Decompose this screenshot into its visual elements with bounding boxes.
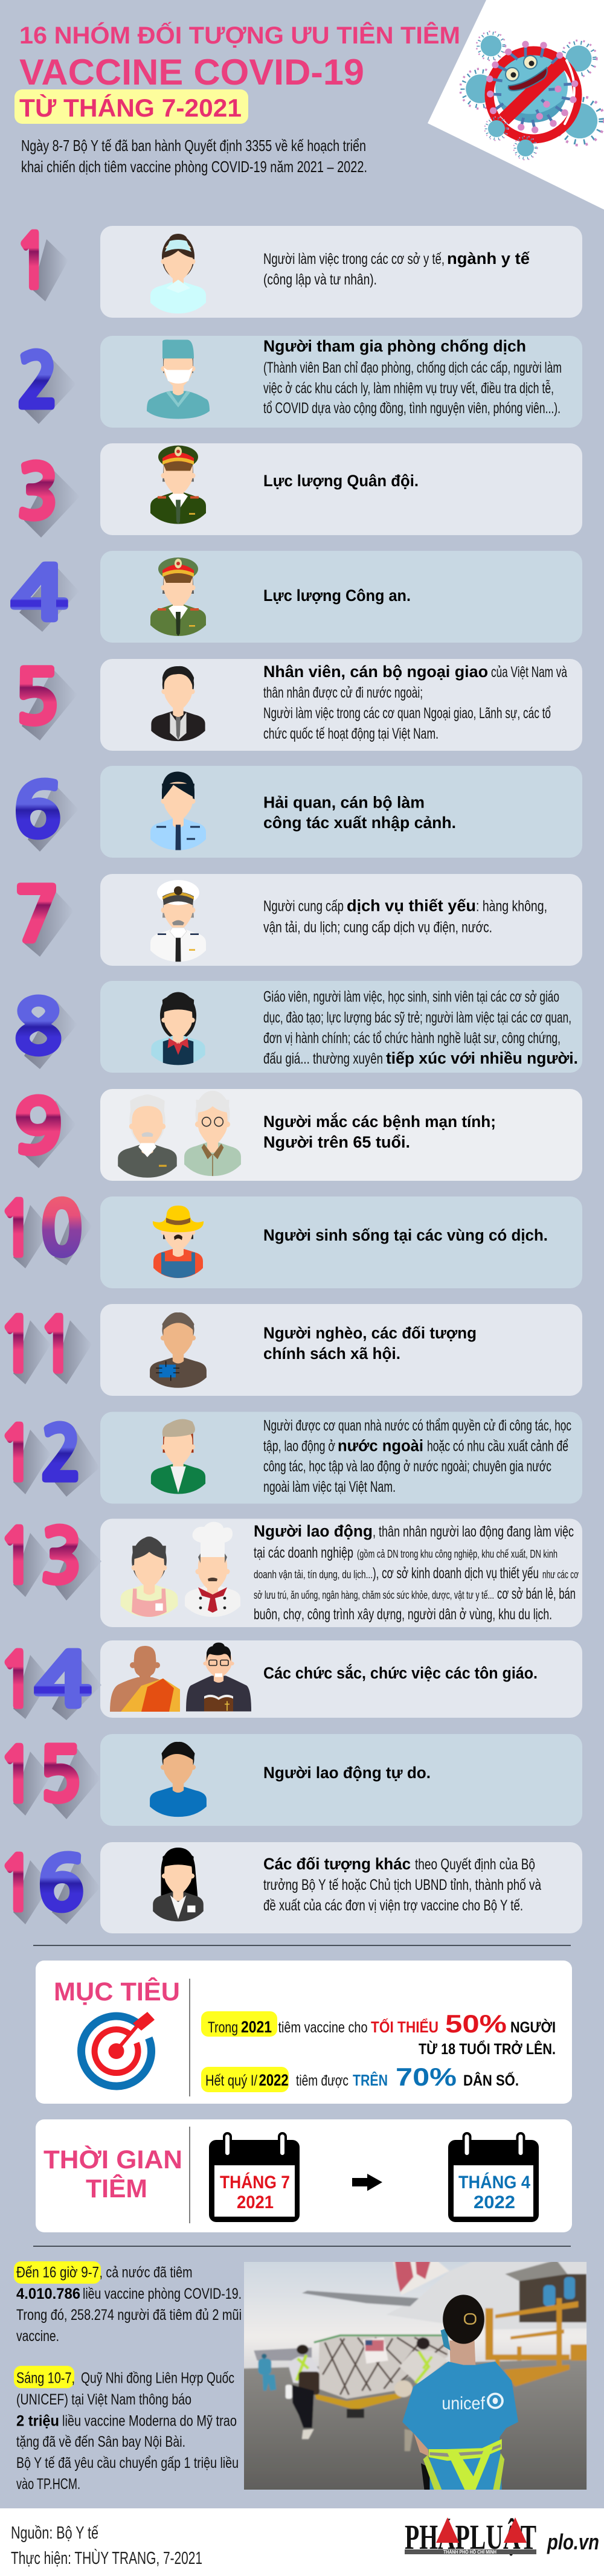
- text: chính sách xã hội.: [263, 1344, 400, 1363]
- icon: female worker: [121, 1537, 178, 1617]
- text: Người cung cấp: [263, 898, 344, 914]
- target 2022: DÂN SỐ.: [463, 2071, 519, 2089]
- text: Người tham gia phòng chống dịch: [263, 337, 526, 355]
- text block: Moderna delivery: 2 triệu: [16, 2412, 59, 2429]
- panel: goal: [36, 1961, 572, 2104]
- text: chức quốc tế hoạt động tại Việt Nam.: [263, 725, 439, 742]
- icon: elderly man: [118, 1094, 177, 1178]
- number 4: 4: [11, 558, 68, 631]
- number 14: 1: [0, 1645, 35, 1718]
- text: [263, 896, 547, 936]
- red ring and slash: [489, 51, 577, 139]
- text: ngoài làm việc tại Việt Nam.: [263, 1479, 396, 1495]
- text: ngành y tế: [447, 249, 530, 268]
- number 1: 1: [15, 226, 50, 299]
- text block: vaccination numbers: Trong đó, 258.274 người đã tiêm đủ 2 mũi: [16, 2307, 242, 2324]
- text: vận tải, du lịch; cung cấp dịch vụ điện, nước.: [263, 919, 492, 936]
- number 3: 3: [17, 457, 59, 530]
- panel: group 13: [0, 1518, 582, 1627]
- text: Các chức sắc, chức việc các tôn giáo.: [263, 1663, 538, 1682]
- icon: elderly woman: [184, 1091, 241, 1176]
- text: [263, 663, 567, 742]
- icon: soldier: [150, 446, 206, 524]
- text: : hàng không,: [476, 898, 547, 914]
- text block: vaccination numbers: Đến 16 giờ 9-7: [16, 2264, 99, 2281]
- target 2022: Hết quý I/: [205, 2072, 257, 2089]
- text: đấu giá... thường xuyên: [263, 1050, 383, 1067]
- number 9: 9: [14, 1091, 63, 1164]
- target 2021: Trong: [208, 2019, 238, 2036]
- text block: Moderna delivery: [14, 2366, 239, 2493]
- calendar: start: THÁNG 7: [220, 2172, 290, 2192]
- calendar: start: 2021: [237, 2192, 274, 2212]
- text block: vaccination numbers: liều vaccine phòng COVID-19.: [83, 2285, 242, 2302]
- target 2021: TỪ 18 TUỔI TRỞ LÊN.: [419, 2040, 556, 2058]
- text: dịch vụ thiết yếu: [347, 896, 476, 914]
- text: nước ngoài: [338, 1436, 423, 1454]
- icon: pilot: [150, 880, 206, 962]
- target 2021: tiêm vaccine cho: [278, 2019, 367, 2036]
- number 6: [13, 775, 79, 852]
- target 2021: 2021: [241, 2018, 272, 2036]
- number 11: [0, 1309, 92, 1384]
- text: đề xuất của các đơn vị viện trợ vaccine cho Bộ Y tế.: [263, 1897, 523, 1914]
- number 14: 4: [34, 1645, 91, 1718]
- icon: freelance worker: [150, 1742, 207, 1817]
- icon: overseas worker: [151, 1419, 205, 1494]
- text: [263, 337, 562, 417]
- target 2022: 70%: [396, 2063, 457, 2091]
- number 15: [0, 1739, 100, 1819]
- text block: vaccination numbers: [14, 2261, 242, 2345]
- panel: group 7: [14, 874, 582, 966]
- number 12: 1: [0, 1418, 35, 1491]
- target 2022: [201, 2063, 519, 2092]
- icon: chef: [185, 1522, 240, 1617]
- text: [263, 1112, 496, 1151]
- photo: vaccine shipment at airport: [240, 2258, 594, 2493]
- number 13: 1: [0, 1521, 35, 1594]
- number 15: 1: [0, 1739, 35, 1813]
- panel: group 15: [0, 1734, 582, 1826]
- panel: group 10: [0, 1193, 582, 1288]
- text: Người làm việc trong các cơ sở y tế,: [263, 251, 445, 268]
- text block: vaccination numbers: , cả nước đã tiêm: [99, 2264, 192, 2281]
- icon: target: [82, 2012, 155, 2086]
- source and author: Nguồn: Bộ Y tế: [11, 2523, 98, 2543]
- text: Người lao động: [254, 1522, 373, 1540]
- text: theo Quyết định của Bộ: [415, 1856, 535, 1873]
- panel: group 12: [0, 1412, 582, 1504]
- icon: police officer: [150, 557, 206, 636]
- panel: group 3: [17, 443, 582, 538]
- number 8: 8: [14, 992, 62, 1065]
- title: VACCINE COVID-19: [19, 52, 364, 92]
- panel: group 8: [14, 981, 582, 1073]
- text: tập, lao động ở: [263, 1437, 335, 1454]
- icon: poor worker: [150, 1312, 207, 1388]
- number 7: 7: [14, 879, 59, 952]
- number 2: 2: [17, 345, 59, 419]
- date badge: TỪ THÁNG 7-2021: [19, 93, 242, 122]
- calendar: end: 2022: [474, 2192, 515, 2212]
- number 16: 6: [37, 1848, 85, 1921]
- panel: group 5: [14, 659, 582, 751]
- target 2022: 2022: [259, 2071, 289, 2089]
- icon: monk: [110, 1646, 180, 1712]
- calendar: start: [209, 2132, 300, 2222]
- text: [263, 794, 456, 832]
- intro paragraph: [21, 137, 367, 176]
- calendar: end: THÁNG 4: [458, 2172, 530, 2192]
- text: Người lao động tự do.: [263, 1764, 431, 1782]
- panel: group 1: [15, 226, 582, 318]
- number 11: 1: [0, 1309, 35, 1383]
- text: tại các doanh nghiệp: [254, 1544, 353, 1561]
- text: (công lập và tư nhân).: [263, 271, 377, 288]
- text block: Moderna delivery: Bộ Y tế đã yêu cầu chuyển gấp 1 triệu liều: [16, 2455, 239, 2472]
- icon: medical worker with mask: [147, 339, 210, 419]
- source and author: [11, 2523, 202, 2568]
- number 10: [0, 1193, 92, 1268]
- panel: group 6: [13, 766, 582, 858]
- number 13: [0, 1521, 101, 1601]
- panel: group 2: [17, 336, 582, 428]
- face: [506, 56, 547, 91]
- panel: group 14: [0, 1640, 582, 1720]
- text block: vaccination numbers: vaccine.: [16, 2328, 59, 2345]
- panel: group 9: [14, 1089, 582, 1181]
- text: như các cơ: [542, 1569, 579, 1581]
- number 14: [0, 1645, 101, 1720]
- spikes: [486, 41, 578, 133]
- text block: Moderna delivery: vào TP.HCM.: [16, 2476, 80, 2493]
- text: Người trên 65 tuổi.: [263, 1133, 410, 1151]
- icon: farmer: [153, 1206, 204, 1278]
- text: Lực lượng Công an.: [263, 586, 411, 605]
- footer band: [0, 2508, 604, 2576]
- icon: office woman: [153, 1848, 204, 1921]
- text: Lực lượng Quân đội.: [263, 472, 419, 490]
- number 10: 1: [0, 1193, 35, 1267]
- text: sở lưu trú, ăn uống, ngân hàng, chăm sóc sức khỏe, dược, vật tư y tế...: [254, 1589, 494, 1601]
- logo: Pháp Luật: THÀNH PHỐ HỒ CHÍ MINH: [443, 2549, 496, 2555]
- heading: goal: MỤC TIÊU: [54, 1977, 180, 2006]
- title: [19, 21, 460, 92]
- text: Hải quan, cán bộ làm: [263, 794, 425, 812]
- text: [263, 1855, 541, 1914]
- number 6: 6: [13, 775, 62, 848]
- target 2022: tiêm được: [296, 2072, 349, 2089]
- icon: priest: [186, 1643, 251, 1712]
- woman in unicef shirt: [402, 2295, 518, 2490]
- source and author: Thực hiện: THÙY TRANG, 7-2021: [11, 2548, 202, 2568]
- intro paragraph: khai chiến dịch tiêm vaccine phòng COVID-19 năm 2021 – 2022.: [21, 158, 367, 176]
- text block: Moderna delivery: tặng đã về đến Sân bay Nội Bài.: [16, 2433, 185, 2450]
- icon: nurse: [150, 234, 206, 313]
- number 12: [0, 1418, 100, 1497]
- text: [263, 1324, 477, 1363]
- panel: group 11: [0, 1304, 582, 1396]
- text: [263, 1418, 571, 1495]
- panel: group 4: [11, 551, 582, 643]
- number 8: [14, 992, 77, 1069]
- panel: timeline: [36, 2119, 572, 2232]
- text: tiếp xúc với nhiều người.: [386, 1049, 578, 1067]
- target 2022: TRÊN: [353, 2071, 388, 2089]
- number 16: [0, 1848, 100, 1924]
- number 12: 2: [40, 1418, 82, 1491]
- text: thân nhân được cử đi nước ngoài;: [263, 684, 423, 701]
- arrow: [352, 2174, 382, 2191]
- heading: timeline: [43, 2145, 182, 2203]
- woman in unicef shirt: unicef: [442, 2394, 485, 2414]
- calendar: end: [448, 2132, 539, 2222]
- logo: Pháp Luật: PHÁPLUẬT: [405, 2517, 536, 2557]
- text: Các đối tượng khác: [263, 1855, 411, 1873]
- target 2021: 50%: [445, 2009, 507, 2038]
- number 4: [11, 558, 79, 632]
- text: công tác xuất nhập cảnh.: [263, 814, 456, 832]
- text: doanh vận tải, tín dụng, du lịch...: [254, 1569, 373, 1581]
- number 3: [17, 457, 80, 538]
- text block: Moderna delivery: liều vaccine Moderna do Mỹ trao: [62, 2412, 237, 2429]
- icon: customs officer: [150, 772, 206, 850]
- text: của Việt Nam và: [491, 664, 567, 681]
- target 2021: NGƯỜI: [510, 2018, 556, 2036]
- text: Người nghèo, các đối tượng: [263, 1324, 477, 1342]
- target 2021: [201, 2009, 556, 2058]
- text: Người sinh sống tại các vùng có dịch.: [263, 1226, 548, 1244]
- icon: virus with prohibition sign: [460, 31, 604, 159]
- text block: vaccination numbers: 4.010.786: [16, 2285, 80, 2302]
- number 15: 5: [39, 1739, 82, 1813]
- text block: Moderna delivery: Sáng 10-7,: [16, 2370, 75, 2387]
- number 13: 3: [40, 1521, 82, 1594]
- text: Người mắc các bệnh mạn tính;: [263, 1112, 496, 1131]
- number 11: 1: [39, 1309, 75, 1383]
- target 2021: TỐI THIỂU: [371, 2018, 439, 2036]
- white corner shape: [428, 0, 604, 210]
- number 5: 5: [14, 662, 59, 735]
- text: [263, 249, 530, 288]
- panel: group 16: [0, 1842, 582, 1933]
- title: 16 NHÓM ĐỐI TƯỢNG ƯU TIÊN TIÊM: [19, 21, 460, 49]
- number 5: [14, 662, 77, 740]
- icon: diplomat: [151, 666, 205, 741]
- heading: timeline: TIÊM: [86, 2174, 147, 2203]
- text: [254, 1522, 579, 1623]
- number 9: [14, 1091, 76, 1168]
- text block: Moderna delivery: Quỹ Nhi đồng Liên Hợp Quốc: [81, 2370, 234, 2387]
- number 10: 0: [40, 1193, 83, 1267]
- number 16: 1: [0, 1848, 35, 1921]
- text: Nhân viên, cán bộ ngoại giao: [263, 663, 488, 681]
- text: [263, 989, 578, 1067]
- icon: teacher: [151, 992, 205, 1065]
- intro paragraph: Ngày 8-7 Bộ Y tế đã ban hành Quyết định 3355 về kế hoạch triển: [21, 137, 366, 155]
- heading: timeline: THỜI GIAN: [43, 2145, 182, 2174]
- text block: Moderna delivery: (UNICEF) tại Việt Nam thông báo: [16, 2391, 191, 2408]
